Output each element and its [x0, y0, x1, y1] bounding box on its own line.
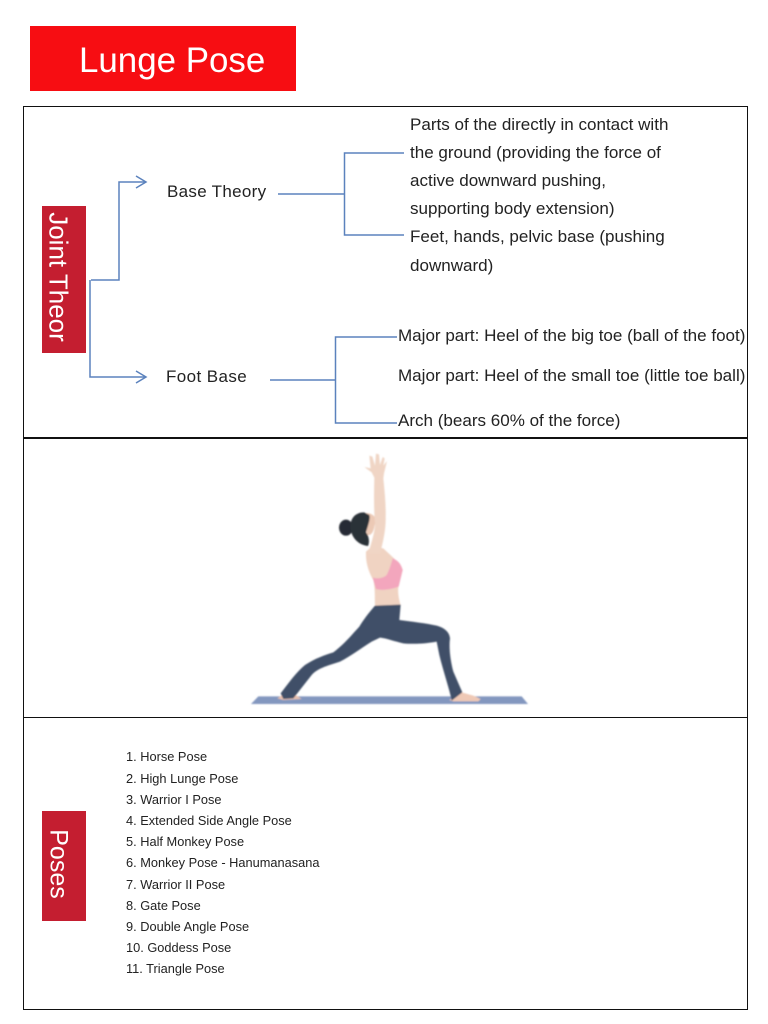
list: poses: 10. Goddess Pose [126, 940, 231, 954]
list: poses: 4. Extended Side Angle Pose [126, 813, 292, 828]
text: base theory details: downward) [410, 256, 493, 275]
panel: joint theory [23, 106, 748, 440]
bra [373, 558, 403, 590]
tag: Poses: Poses [44, 829, 72, 899]
panel: pose photo [23, 439, 748, 718]
text: arch: Arch (bears 60% of the force) [398, 411, 620, 430]
text: base theory details: Parts of the directly in contact with [410, 114, 668, 134]
list: poses: 1. Horse Pose [126, 749, 207, 764]
hair [339, 520, 353, 536]
list: poses: 2. High Lunge Pose [126, 770, 238, 786]
illustration: woman in lunge pose [250, 453, 528, 705]
mat [251, 696, 528, 704]
text: base theory details [410, 114, 668, 275]
label: Base Theory: Base Theory [167, 182, 266, 201]
title banner: Lunge Pose [79, 41, 265, 80]
list: poses: 9. Double Angle Pose [126, 918, 249, 934]
title banner [30, 26, 296, 91]
feet [277, 694, 302, 700]
text: base theory details: Feet, hands, pelvic base (pushing [410, 227, 665, 246]
tag: Joint Theor [42, 206, 86, 353]
text: small toe heel: Major part: Heel of the small toe (little toe ball) [398, 366, 745, 385]
list: poses: 11. Triangle Pose [126, 960, 225, 976]
list: poses: 6. Monkey Pose - Hanumanasana [126, 855, 319, 870]
leggings [281, 605, 462, 701]
label: Foot Base: Foot Base [166, 367, 247, 386]
list: poses: 3. Warrior I Pose [126, 792, 222, 806]
tag: Poses [42, 811, 86, 921]
text: base theory details: the ground (providing the force of [410, 143, 661, 162]
list: poses: 7. Warrior II Pose [126, 876, 225, 892]
raised arm and hand [364, 454, 387, 553]
list: poses [126, 749, 320, 976]
panel: poses list [23, 717, 748, 1010]
text: base theory details: active downward pushing, [410, 171, 606, 190]
text: base theory details: supporting body extension) [410, 199, 615, 218]
list: poses: 5. Half Monkey Pose [126, 834, 244, 849]
tag: Joint Theor: Joint Theor [44, 212, 74, 342]
face [365, 513, 376, 535]
torso [366, 547, 403, 606]
list: poses: 8. Gate Pose [126, 898, 201, 912]
text: big toe heel: Major part: Heel of the big toe (ball of the foot) [398, 326, 745, 345]
